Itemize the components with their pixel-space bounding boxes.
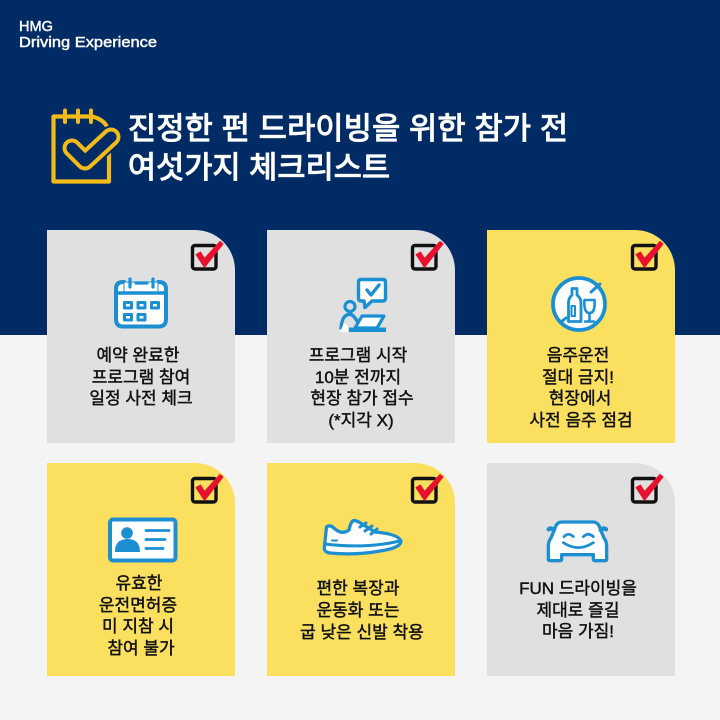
icon: red checkbox [632, 242, 663, 269]
icon: sneaker [324, 520, 401, 554]
card text: 예약 완료한 [97, 346, 180, 365]
card text [99, 574, 177, 658]
title: 여섯가지 체크리스트 [128, 151, 390, 185]
card text [529, 346, 633, 430]
card text [89, 346, 193, 408]
card background [267, 230, 455, 443]
card background [47, 463, 235, 676]
card text: 사전 음주 점검 [529, 411, 633, 430]
card background [487, 463, 675, 676]
icon: red checkbox [192, 474, 223, 502]
panel: fun driving mindset [487, 463, 675, 676]
panel: driver license [47, 463, 235, 676]
card text: 운전면허증 [99, 596, 177, 615]
card text: 미 지참 시 [102, 617, 174, 636]
icon: ID card [110, 520, 176, 560]
card text: 프로그램 참여 [92, 368, 190, 387]
icon: red checkbox [192, 242, 223, 269]
navy header band [0, 0, 720, 335]
icon: calendar [116, 279, 166, 326]
card text: 유효한 [116, 574, 163, 593]
card text: 현장 참가 접수 [310, 389, 414, 408]
card background [47, 230, 235, 443]
card text [300, 579, 424, 642]
card text: 프로그램 시작 [309, 346, 408, 365]
panel: reservation check [47, 230, 235, 443]
card text: 참여 불가 [107, 639, 175, 658]
icon: person with laptop and speech bubble [340, 280, 386, 332]
icon: smiling car [548, 522, 607, 561]
brand logo text [19, 19, 157, 51]
icon: red checkbox [632, 474, 663, 502]
icon: no alcohol [553, 278, 605, 330]
panel: on-site registration [267, 230, 455, 443]
title [128, 112, 568, 185]
card text: 10분 전까지 [315, 368, 401, 387]
icon: red checkbox [412, 242, 443, 269]
card text: 절대 금지! [542, 368, 614, 387]
card text: 마음 가짐! [542, 622, 614, 641]
card text [309, 346, 414, 430]
card text: 음주운전 [547, 346, 609, 365]
icon: red checkbox [412, 474, 443, 502]
card background [487, 230, 675, 443]
title: 진정한 펀 드라이빙을 위한 참가 전 [128, 112, 568, 146]
brand logo text: Driving Experience [19, 35, 157, 51]
card text: 편한 복장과 [317, 579, 400, 598]
brand logo text: HMG [19, 19, 53, 35]
card text: 굽 낮은 신발 착용 [300, 623, 424, 642]
panel: comfortable shoes [267, 463, 455, 676]
card text: (*지각 X) [328, 411, 394, 430]
card text: FUN 드라이빙을 [519, 579, 637, 598]
card text: 제대로 즐길 [537, 601, 619, 620]
panel: no drunk driving [487, 230, 675, 443]
card text: 현장에서 [549, 389, 611, 408]
card text [519, 579, 637, 641]
card text: 운동화 또는 [317, 601, 399, 620]
card text: 일정 사전 체크 [89, 389, 193, 408]
card background [267, 463, 455, 676]
icon: notepad with check [54, 110, 111, 182]
